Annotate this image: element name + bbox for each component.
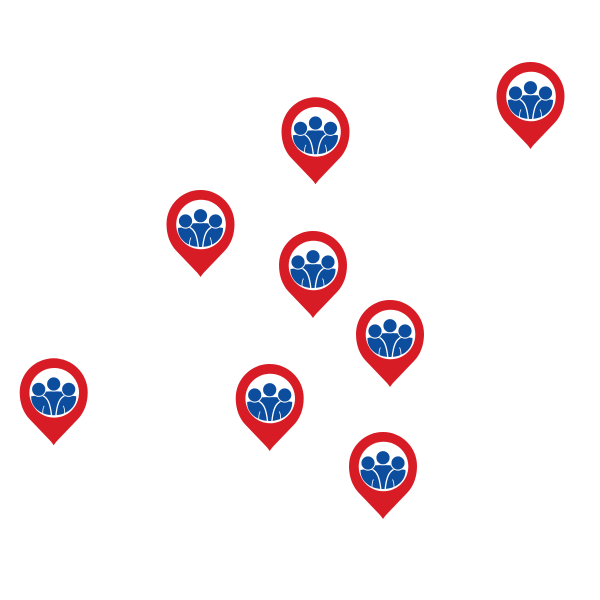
pin: bottom right [349,432,417,519]
pin: centre [279,231,347,318]
pin: far left [20,358,88,445]
pin: centre right [356,300,424,387]
pin: lower centre [236,364,304,451]
pin: upper centre [282,97,350,184]
pin: top right [496,62,564,149]
pin: middle left [166,190,234,277]
